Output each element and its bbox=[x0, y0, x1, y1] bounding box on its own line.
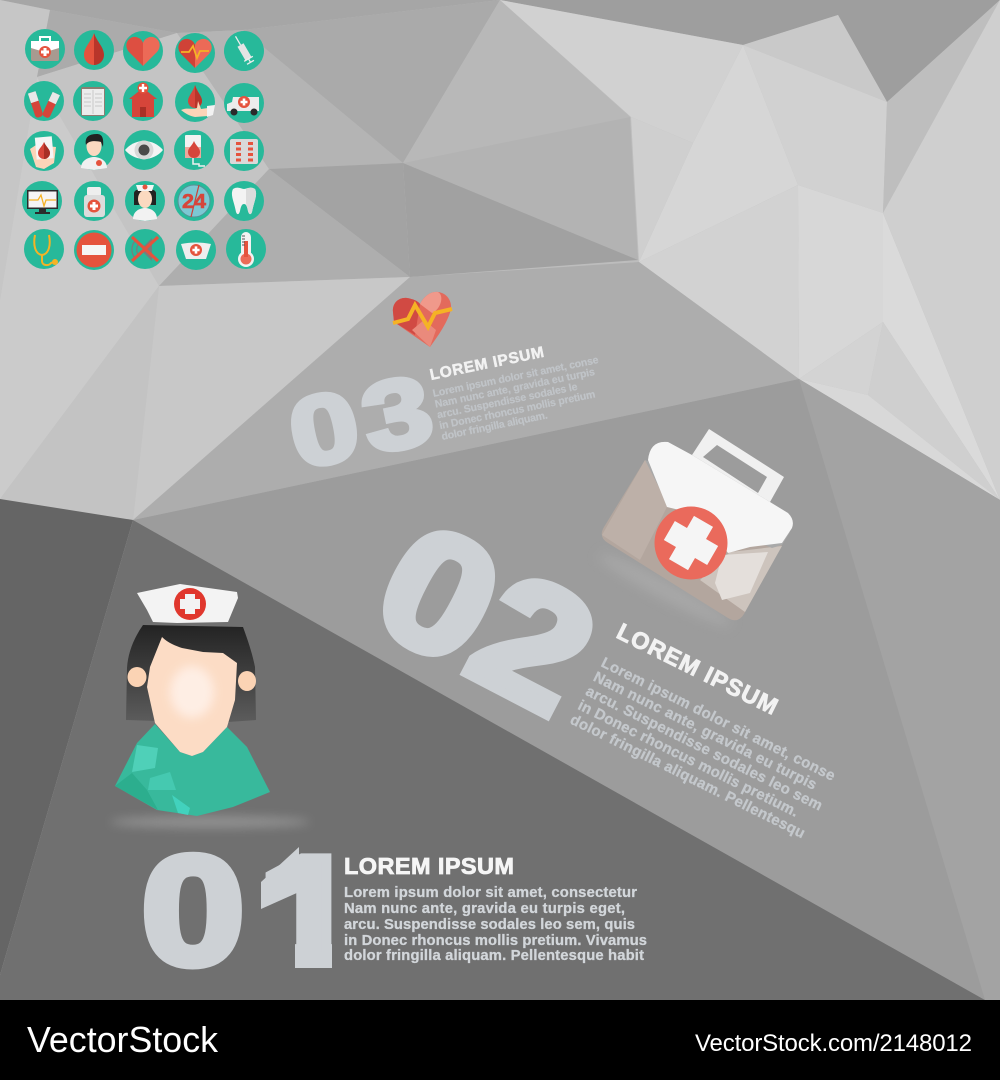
icon: heart with pulse bbox=[175, 33, 215, 73]
heading and text 01: Nam nunc ante, gravida eu turpis eget, bbox=[344, 901, 625, 917]
heading and text 01: arcu. Suspendisse sodales leo sem, quis bbox=[344, 917, 635, 933]
icon: no entry bbox=[74, 230, 114, 270]
icon: heart bbox=[123, 31, 163, 71]
numeral 03: 03 bbox=[280, 354, 442, 490]
heading and text 03: in Donec rhoncus mollis pretium bbox=[438, 388, 596, 432]
icon: 24 hour clock: 24 bbox=[182, 191, 207, 213]
numeral 02: 02 bbox=[349, 487, 623, 750]
heading and text 01: dolor fringilla aliquam. Pellentesque habit bbox=[344, 948, 644, 964]
icon: hand with blood drop bbox=[175, 82, 215, 122]
heading and text 03: arcu. Suspendisse sodales le bbox=[436, 381, 579, 421]
icon: doctor bbox=[74, 130, 114, 170]
icon: pill pack bbox=[224, 131, 264, 171]
heading and text 02: Nam nunc ante, gravida eu turpis bbox=[591, 668, 819, 794]
footer url: VectorStock.com/2148012 bbox=[695, 1030, 972, 1057]
icon: heart monitor bbox=[22, 181, 62, 221]
icon: thermometer bbox=[226, 229, 266, 269]
footer logo: VectorStock bbox=[27, 1019, 219, 1060]
heading and text 03: Nam nunc ante, gravida eu turpis bbox=[434, 366, 596, 411]
icon: nurse cap bbox=[176, 230, 216, 270]
icon: low-poly heart bbox=[393, 292, 452, 347]
heading and text 02: arcu. Suspendisse sodales leo sem bbox=[583, 683, 825, 814]
figure: nurse bbox=[110, 584, 310, 828]
icon: first aid kit large bbox=[595, 429, 793, 633]
footer bar bbox=[0, 1000, 1000, 1080]
icon: eye bbox=[124, 130, 164, 170]
icon: tooth bbox=[224, 181, 264, 221]
heading and text 01: LOREM IPSUM bbox=[344, 853, 514, 879]
section 02 bbox=[349, 429, 857, 843]
icon: hand holding blood bag bbox=[24, 131, 64, 171]
heading and text 02 bbox=[567, 617, 857, 843]
heading and text 02: Lorem ipsum dolor sit amet, conse bbox=[598, 654, 838, 785]
heading and text 03: dolor fringilla aliquam. bbox=[440, 409, 549, 443]
heading and text 01 bbox=[344, 853, 647, 964]
icon: 24 hour clock bbox=[174, 181, 214, 221]
icon grid bbox=[22, 24, 271, 270]
heading and text 03: LOREM IPSUM bbox=[428, 344, 545, 384]
icon: clipboard bbox=[73, 81, 113, 121]
icon: stethoscope bbox=[24, 229, 64, 269]
numeral 01: 01 bbox=[141, 825, 361, 997]
icon: blood drop bbox=[74, 30, 114, 70]
icon: first aid kit bbox=[25, 29, 65, 69]
heading and text 03 bbox=[427, 333, 609, 443]
icon: nurse bbox=[125, 181, 165, 221]
icon: test tubes bbox=[24, 81, 64, 121]
heading and text 02: in Donec rhoncus mollis pretium. bbox=[575, 697, 801, 821]
section 03 bbox=[280, 292, 609, 490]
section 01 bbox=[110, 584, 647, 997]
heading and text 01: Lorem ipsum dolor sit amet, consectetur bbox=[344, 885, 637, 901]
icon: blood bag bbox=[174, 130, 214, 170]
icon: syringe bbox=[217, 24, 271, 78]
heading and text 01: in Donec rhoncus mollis pretium. Vivamus bbox=[344, 933, 647, 949]
heading and text 03: Lorem ipsum dolor sit amet, conse bbox=[432, 354, 600, 400]
icon: hospital bbox=[123, 81, 163, 121]
heading and text 02: LOREM IPSUM bbox=[613, 618, 782, 720]
icon: muted speaker bbox=[125, 229, 165, 269]
icon: ambulance bbox=[224, 83, 264, 123]
icon: medicine bottle bbox=[74, 181, 114, 221]
heading and text 02: dolor fringilla aliquam. Pellentesqu bbox=[567, 711, 808, 842]
